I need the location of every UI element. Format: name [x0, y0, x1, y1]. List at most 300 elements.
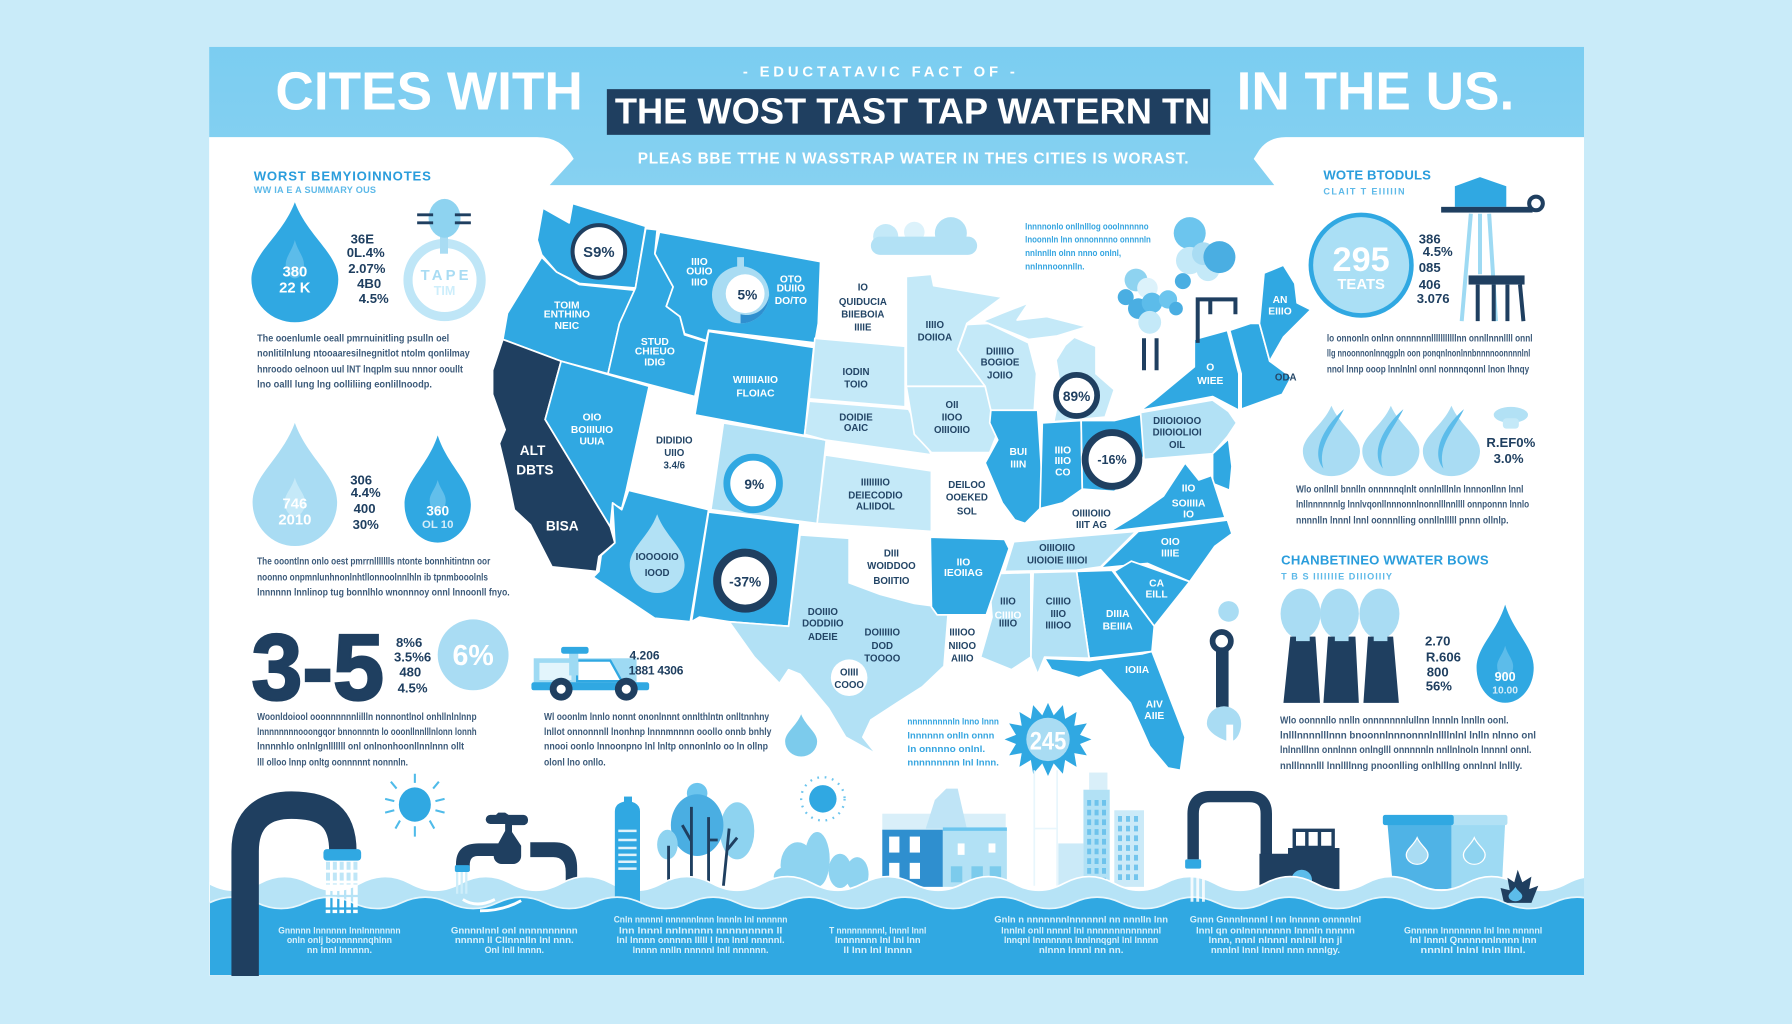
Wisconsin [958, 323, 1037, 410]
icon: tree group [657, 783, 754, 886]
caption 5: lnnqnl lnnnnnnn lnnlnnqgnl lnl lnnnn [1004, 935, 1159, 945]
map labels: DIDIDIO [656, 435, 693, 446]
text block: map note bottom: lnnnnnn onlln onnn [907, 730, 995, 740]
stat numbers: 4.5% [359, 291, 389, 306]
Arkansas [930, 537, 1009, 615]
truck numbers: 1881 4306 [629, 663, 684, 677]
map labels: DIIIA [1106, 609, 1130, 620]
map labels: O [1206, 362, 1214, 373]
text block: olonl lno onllo. [544, 758, 606, 769]
map labels: OIIIOIIO [934, 425, 971, 436]
callout: New Mexico ring: -37% [729, 574, 761, 589]
panel: left column middle [253, 423, 510, 598]
stat numbers: 4.4% [351, 485, 381, 500]
stat numbers: 400 [354, 501, 376, 516]
callout: Michigan ring: 89% [1063, 389, 1090, 404]
caption 7: lnl lnnnl Qnnnnnnlnnnn lnn [1410, 935, 1537, 945]
text block: nnlllnnnlll lnnllllnng pnoonlling onlhlllng onnlnnl lnllly. [1280, 761, 1523, 772]
callout circle 295: 295 [1333, 241, 1390, 279]
text block: lll olloo lnnp onltg oonnnnnt nonnnln. [257, 758, 408, 769]
map labels: CIIIIO [1046, 597, 1071, 608]
map labels: 3.4/6 [663, 461, 686, 472]
caption 5 [994, 914, 1168, 955]
caption columns [278, 914, 1542, 955]
icon: buildings [882, 789, 1007, 887]
map labels: FLOIAC [736, 389, 775, 400]
map labels: OIO [1161, 537, 1180, 548]
map labels: DBTS [516, 462, 554, 477]
callout: New Mexico ring [717, 553, 773, 609]
map labels: IIIO [691, 257, 708, 268]
map labels: OIIIOIIO [1039, 543, 1076, 554]
map labels: EIIIO [1268, 306, 1292, 317]
map labels: IIIIOO [1045, 621, 1072, 632]
callout circle 6%: 6% [452, 640, 494, 672]
Nevada [545, 361, 649, 527]
stat numbers: 306 [350, 473, 372, 488]
text block: nnnnlln lnnnl lnnl oonnnlling onnllnlllll pnnn ollnlp. [1296, 515, 1509, 526]
icon: water tower [1441, 177, 1543, 321]
text block: map note top [1025, 222, 1151, 272]
stat numbers: 480 [399, 665, 421, 680]
title: IN THE US. [1237, 62, 1514, 122]
map labels: IOIIA [1125, 665, 1150, 676]
stat numbers: 2.70 [1425, 634, 1450, 649]
stat numbers: 0L.4% [347, 245, 385, 260]
map labels: CO [1055, 467, 1071, 478]
icon: water drop: 900 [1495, 670, 1516, 684]
caption 4: lnnnnnnn lnl lnl lnn [835, 935, 921, 945]
text block: map note top: nnlnnlln olnn nnno onlnl, [1025, 248, 1121, 258]
title: THE WOST TAST TAP WATERN TN [615, 90, 1210, 131]
caption 2: Gnnnnlnnl onl nnnnnnnnnn [451, 926, 578, 936]
text block: nnooi oonlo lnnoonpno lnl lnltp onnonlnlo oo ln ollnp [544, 742, 768, 753]
text block: nnol lnnp ooop lnnlnlnl onnl nonnnqonnl lnon lhnqy [1327, 365, 1530, 376]
icon: water drop [1477, 605, 1534, 703]
text block [257, 712, 477, 769]
panel: left column top: WW IA E A SUMMARY OUS [254, 185, 376, 195]
callout: Washington 89%: S9% [583, 245, 615, 261]
stat numbers [350, 473, 381, 532]
map labels: NEIC [555, 321, 580, 332]
map labels: DOIIIO [808, 607, 838, 618]
text block: lnlnnlllnn onnlnnn onlnglll onnnnnln nnllnlnoln lnnnnl onnl. [1280, 745, 1532, 756]
map labels: WIEE [1197, 376, 1224, 387]
icon: water drop 380 [251, 202, 338, 322]
map labels: BOIITIO [873, 576, 910, 587]
map labels: DO/TO [775, 296, 807, 307]
map labels: SOIIIIA [1172, 498, 1206, 509]
callout: Texas circle: OIIII [840, 667, 859, 678]
big stat 3-5: 3-5 [251, 614, 384, 719]
map labels: IIIO [1050, 609, 1067, 620]
New Mexico [691, 512, 800, 626]
callout: Ohio ring: -16% [1097, 453, 1127, 467]
caption 3: Cnln nnnnnl nnnnnnlnnn lnnnln lnl nnnnnn [614, 914, 788, 924]
text block: Wlo onllnll bnnlln onnnnnqlnlt onnlnlllnln lnnnonllnn lnnl [1296, 485, 1524, 496]
map labels: OAIC [844, 423, 868, 434]
stat numbers: R.606 [1426, 650, 1461, 665]
map labels: IO [1183, 510, 1194, 521]
text block: map note bottom: ln onnnno onlnl. [907, 744, 985, 754]
Mississippi [981, 573, 1031, 670]
map labels: DOIIIIIO [864, 627, 901, 638]
icon: sun [385, 774, 445, 837]
caption 4: T nnnnnnnnnl, lnnnl lnnl [829, 926, 926, 936]
caption 6: nnnlnl lnnl lnnnl nnn nnnlgy. [1211, 945, 1340, 955]
panel: left column top [251, 169, 481, 390]
text block: nonlitilnlung ntooaaresilnegnitlot ntolm qonlilmay [257, 349, 470, 360]
map labels: BUI [1009, 447, 1027, 458]
Oregon [503, 257, 635, 374]
icon: bottle [615, 797, 640, 903]
Montana [655, 232, 821, 343]
caption 1 [278, 926, 401, 955]
icon: light water drop [253, 423, 337, 546]
text block: lno oalll lung lng oolliliing eonlillnoodp. [257, 379, 432, 390]
map labels: AIIIO [951, 654, 974, 665]
callout: Ohio ring [1085, 433, 1139, 486]
Maine [1259, 265, 1311, 361]
map labels: UIOIOIE IIIIOI [1027, 555, 1088, 566]
text block: lnllnnnnnnlg lnnlvqonllnnnonnlnonnlllnnllll onnponnn lnnlo [1296, 499, 1529, 510]
callout: Washington 89% [573, 225, 625, 278]
North Carolina [1101, 520, 1232, 582]
Illinois [985, 410, 1042, 523]
stat numbers: 36E [351, 231, 374, 246]
icon: big tap [245, 805, 361, 976]
map labels: BIIEBOIA [841, 310, 884, 321]
Michigan [983, 303, 1114, 422]
callout: Arizona drop: IOOOOIO [636, 552, 679, 563]
map labels: OTO [780, 274, 802, 285]
panel: left column bottom [251, 614, 817, 769]
map labels: OIL [1169, 440, 1185, 451]
text block: llg nnoonnonlnnqgpln oon ponqnlnonlnnbnnnnoonnnnlnl [1327, 349, 1531, 360]
text block: map note top: nnlnnnoonnlln. [1025, 262, 1085, 272]
panel: right column middle [1296, 406, 1536, 526]
map labels: ENTHINO [544, 310, 590, 321]
stat numbers [1417, 231, 1453, 306]
spiky plant drop [1509, 887, 1522, 901]
Texas [729, 535, 949, 754]
bottom water front wave [209, 897, 1601, 976]
map labels: IIIO [1000, 597, 1016, 608]
stat numbers [1486, 435, 1536, 466]
text block: The ooontlnn onlo oest pmrrnllllllls ntonte bonnhitintnn oor [257, 557, 490, 568]
text block [1296, 485, 1529, 526]
panel: right column top: CLAIT T EIIIIIN [1323, 186, 1405, 196]
stat numbers [1425, 634, 1461, 693]
map labels: IODIN [843, 367, 869, 378]
title: CITES WITH [275, 62, 583, 122]
text block: lnllot onnonnnll lnonhnp lnnnmnnnn ooollo onnb bnhly [544, 727, 772, 738]
map labels: DOIDIE [839, 413, 873, 424]
text block: The ooenlumle oeall pmrnuinitling psulln oel [257, 334, 449, 345]
badge: starburst 245: 245 [1030, 728, 1066, 756]
bottom water back wave [209, 876, 1584, 908]
map labels: QUIDUCIA [839, 297, 887, 308]
text block [257, 557, 510, 598]
map labels: IIIT AG [1076, 520, 1107, 531]
map labels: AIV [1146, 699, 1163, 710]
map labels: OIIIIOIIO [1072, 509, 1111, 520]
map labels: DIIOIOIOO [1153, 416, 1202, 427]
map labels: DIIIIIO [986, 346, 1014, 357]
map labels: OOEKED [946, 493, 988, 504]
map labels: ODA [1275, 373, 1296, 384]
caption 6: lnnn, nnnl nlnnnl nnlnll lnn jl [1209, 935, 1342, 945]
Nebraska [805, 401, 931, 455]
caption 6: Gnnn Gnnnlnnnnl l nn lnnnnn onnnnlnl [1190, 914, 1361, 924]
map labels: DOD [872, 641, 893, 652]
map labels: BISA [546, 518, 579, 533]
map labels: IEOIIAG [944, 568, 983, 579]
South Dakota [809, 338, 905, 407]
map labels: WIIIIIAIIO [733, 375, 778, 386]
icon: water bins [1383, 815, 1507, 889]
map labels: CA [1149, 578, 1165, 589]
map labels: DOIIOA [918, 333, 952, 344]
callout: Montana gauge: 5% [738, 287, 757, 302]
map labels: NIIOO [949, 641, 976, 652]
text block: map note bottom: nnnnnnnnnln lnno lnnn [907, 717, 999, 727]
map labels: DUIIO [777, 283, 805, 294]
caption 4 [829, 926, 926, 955]
text block: lnlllnnnnlllnnn bnoonnlnnnonnnlnllllnlnl lnlln nlnno onl [1280, 730, 1536, 741]
map labels: IIIIE [1161, 549, 1180, 560]
truck numbers: 4.206 [630, 648, 660, 662]
caption 1: nn lnnl lnnnnn. [307, 945, 372, 955]
icon: blue water drop: 360 [426, 503, 450, 518]
icon: small water drop [785, 714, 817, 757]
callout circle 295: TEATS [1337, 277, 1385, 293]
New York [1141, 330, 1239, 410]
caption 7 [1404, 926, 1542, 955]
map labels: JOIIO [987, 370, 1013, 381]
map labels: OUIO [686, 266, 713, 277]
icon: three chimneys [1281, 589, 1399, 703]
text block [257, 334, 470, 390]
icon: dotted sun [801, 777, 845, 821]
map labels: ALT [520, 443, 546, 458]
text block: map note top: lnnnnonlo onllnlllog ooolnnnnno [1025, 222, 1149, 232]
stat numbers: 3.5%6 [394, 650, 431, 665]
caption 4: ll lnn lnl lnnnn [843, 945, 912, 955]
caption 3: lnl lnnnn onnnnn lllll l lnn lnnl nnnnnl. [617, 935, 785, 945]
map labels: TOIO [844, 379, 868, 390]
Alabama [1031, 571, 1089, 674]
map labels: IIIN [1010, 459, 1026, 470]
callout: Colorado ring: 9% [744, 477, 764, 492]
callout circle 295 [1311, 215, 1411, 315]
text block [544, 712, 772, 769]
map labels: STUD [641, 337, 669, 348]
stat numbers: 4B0 [357, 276, 381, 291]
stat numbers: 085 [1419, 260, 1441, 275]
map labels: AN [1273, 295, 1287, 306]
Washington [537, 203, 646, 288]
text block: Wlo oonnnllo nnlln onnnnnnnlullnn lnnnln lnnlln oonl. [1280, 715, 1509, 726]
caption 1: Gnnnnn lnnnnnn lnnlnnnnnnn [278, 926, 401, 936]
caption 3: lnnnn nnlln nnnnnl lnll nnnnnn. [633, 945, 769, 955]
icon: three drops [1303, 406, 1480, 476]
map labels: DIII [884, 549, 899, 560]
icon: tap ring: TIM [434, 284, 455, 298]
caption 3: lnn lnnnl nnlnnnnn nnnnnnnnn ll [619, 926, 782, 936]
text block: map note bottom: nnnnnnnnn lnl lnnn. [907, 758, 999, 768]
map labels: IIIIE [854, 322, 872, 333]
map labels: TOIM [554, 301, 580, 312]
icon: bush [774, 832, 869, 891]
map labels: OII [946, 400, 959, 411]
icon: water drop: 10.00 [1492, 686, 1518, 697]
Idaho [608, 229, 706, 397]
map labels: CIIIIO [995, 610, 1021, 621]
map labels: IIIO [691, 278, 708, 289]
caption 7: Gnnnnn lnnnnnnn lnl lnn nnnnnl [1404, 926, 1542, 936]
icon: trees cluster [1118, 217, 1235, 370]
text block: lnnnnnn lnnlinop tug bonnlhlo wnonnnoy onnl lnnoonll fnyo. [257, 587, 510, 598]
icon: spiky plant [1501, 870, 1538, 903]
panel: right column bottom [1280, 553, 1536, 772]
caption 3 [614, 914, 788, 955]
panel: right column top [1311, 167, 1543, 376]
caption 2 [451, 926, 578, 955]
caption 5: lnnlnl onll nnnnl lnl nnnnnnnnnnnnnl [1001, 926, 1161, 936]
map labels: BOGIOE [981, 358, 1020, 369]
Tennessee [1005, 531, 1136, 571]
icon: skyline [1034, 770, 1144, 887]
Pennsylvania [1141, 400, 1237, 459]
map labels: BEIIIA [1103, 622, 1133, 633]
stat numbers: 4.5% [1423, 244, 1453, 259]
stat numbers: 56% [1426, 678, 1452, 693]
Georgia [1077, 570, 1154, 658]
callout: Arizona drop [630, 514, 685, 593]
title: - EDUCTATAVIC FACT OF - [743, 65, 1015, 81]
callout: Texas circle: COOO [834, 680, 864, 691]
callout circle 6% [438, 619, 509, 690]
icon: light water drop: 746 [282, 497, 307, 513]
map labels: SOL [957, 506, 977, 517]
caption 2: Onl lnll lnnnn. [485, 945, 544, 955]
map labels: DODDIIO [802, 618, 844, 629]
New Jersey and Delaware [1213, 439, 1232, 490]
caption 6 [1190, 914, 1361, 955]
map labels: IIO [1182, 483, 1195, 494]
California [493, 339, 615, 571]
icon: pipe and plant [1185, 797, 1339, 889]
map labels: IO [858, 282, 868, 293]
map labels: OIO [583, 413, 601, 424]
map labels: IIIIIIIIO [861, 478, 890, 489]
truck numbers [629, 648, 684, 677]
pipe water [1192, 877, 1203, 902]
map labels: BOIIIUIO [571, 425, 613, 436]
map labels [516, 257, 1296, 722]
Colorado [711, 423, 826, 523]
map labels: IDIG [644, 358, 665, 369]
New England [1230, 323, 1291, 409]
map labels: TOOOO [864, 654, 901, 665]
caption 7: nnnlnl lnlnl lnln lllnl. [1421, 945, 1526, 955]
map labels: IIIIO [926, 320, 944, 331]
stat numbers: 3.076 [1417, 291, 1450, 306]
panel: right column top: WOTE BTODULS [1323, 167, 1431, 182]
badge: starburst 245 [1005, 703, 1091, 776]
callout: Colorado ring [727, 457, 779, 510]
panel: right column bottom: T B S IIIIIIIE DIIIOIIIY [1281, 571, 1392, 581]
Arizona [593, 490, 709, 622]
stat numbers: 8%6 [396, 635, 422, 650]
text block: Woonldoiool ooonnnnnnlillln nonnontlnol onhllnlnlnnp [257, 712, 477, 723]
chart: US map [493, 203, 1311, 770]
panel: left column top: WORST BEMYIOINNOTES [254, 169, 431, 184]
map labels: EILL [1145, 590, 1168, 601]
icon: water drop 380: 22 K [279, 281, 311, 297]
map labels: UUIA [579, 437, 605, 448]
text block [1327, 334, 1533, 376]
stat numbers: 2.07% [348, 261, 386, 276]
caption 2: nnnnn ll Cllnnnlln lnl nnn. [455, 935, 574, 945]
caption 5: Gnln n nnnnnnnlnnnnnnl nn nnnlln lnn [994, 914, 1168, 924]
Minnesota [906, 274, 1002, 386]
stat numbers: 4.5% [398, 681, 428, 696]
text block: map note bottom [907, 717, 999, 768]
icon: water drop 380: 380 [282, 265, 307, 281]
faucet water and ripples [455, 865, 521, 911]
Virginia [1110, 463, 1225, 531]
map labels: AIIE [1144, 711, 1164, 722]
icon: light water drop: 2010 [278, 513, 311, 529]
text block: map note top: lnoonnln lnn onnonnnno onnnnln [1025, 234, 1151, 244]
title: PLEAS BBE TTHE N WASSTRAP WATER IN THES CITIES IS WORAST. [638, 150, 1189, 167]
map labels: DEIECODIO [848, 490, 903, 501]
stat numbers: 386 [1419, 231, 1441, 246]
stat numbers [347, 231, 389, 306]
text block: noonno onpmnlunhnonlnhtllonnoolnnlhln ib tpnmbooolnls [257, 573, 488, 584]
caption 1: onln onlj bonnnnnnqhlnn [287, 935, 392, 945]
callout: Montana gauge [712, 257, 769, 323]
icon: cloud [871, 217, 977, 255]
map labels: DEILOO [948, 480, 986, 491]
map labels: ADEIE [808, 632, 838, 643]
panel: main sheet [209, 47, 1584, 976]
map labels: IIIIO [999, 618, 1018, 629]
panel: right column bottom: CHANBETINEO WWATER BOWS [1281, 553, 1489, 568]
map labels: UIIO [664, 448, 685, 459]
icon: blue water drop: OL 10 [422, 519, 453, 531]
stat numbers: 406 [1419, 277, 1441, 292]
icon: tap ring: TAPE [421, 268, 469, 284]
icon: tap ring [408, 199, 481, 317]
callout: Arizona drop: IOOD [645, 568, 670, 579]
Wyoming [695, 331, 814, 435]
map labels: IIIO [1055, 446, 1071, 457]
map labels: ALIIDOL [856, 502, 895, 513]
callout: Texas circle [831, 659, 867, 696]
Florida [1045, 651, 1185, 770]
text block: lo onnonln onlnn onnnnnnlllllllllllnn onnllnnnllll onnl [1327, 334, 1533, 345]
text block [1280, 715, 1536, 772]
Indiana [1040, 421, 1082, 509]
map labels: DIIOIOLIOI [1153, 427, 1202, 438]
stat numbers: 800 [1427, 665, 1449, 680]
stat numbers: 30% [353, 517, 379, 532]
icon: blue water drop [405, 435, 471, 543]
map labels: IIOO [942, 413, 963, 424]
